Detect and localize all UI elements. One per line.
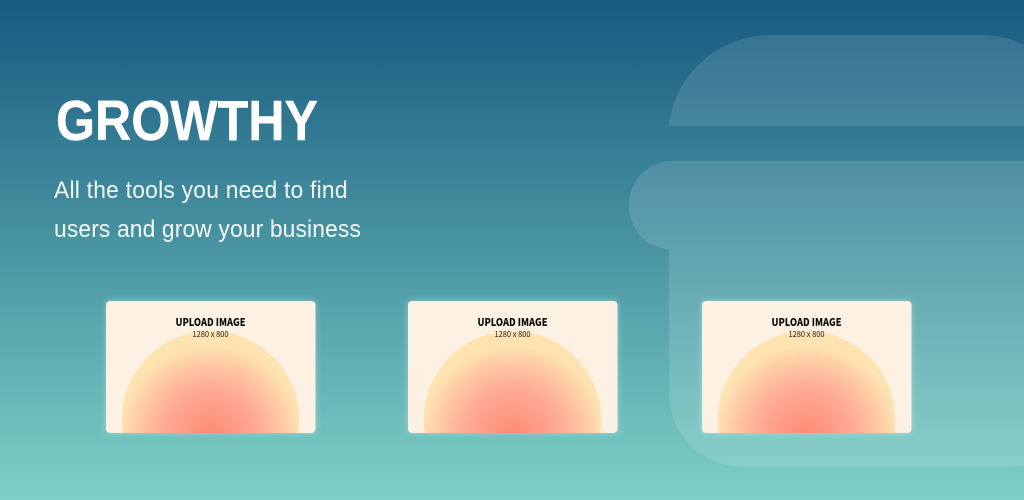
sun gradient 2 <box>424 331 602 433</box>
size label 1: 1280 x 800 <box>192 329 229 340</box>
subtitle line 2: users and grow your business <box>54 215 361 242</box>
upload label 1: UPLOAD IMAGE <box>176 315 246 330</box>
image placeholder card 1 <box>102 298 319 436</box>
sun gradient 3 <box>718 331 896 433</box>
image placeholder card 3 <box>698 298 915 436</box>
upload label 2: UPLOAD IMAGE <box>478 315 548 330</box>
image placeholder card 2 <box>404 298 621 436</box>
decorative background shapes <box>629 35 1024 467</box>
upload label 3: UPLOAD IMAGE <box>772 315 842 330</box>
size label 3: 1280 x 800 <box>788 329 825 340</box>
size label 2: 1280 x 800 <box>494 329 531 340</box>
shape: lower rounded block with side pill <box>629 161 1024 467</box>
shape: upper rounded block <box>669 35 1024 126</box>
subtitle line 1: All the tools you need to find <box>54 176 348 203</box>
title: GROWTHY <box>56 89 318 153</box>
subtitle <box>54 176 361 242</box>
sun gradient 1 <box>122 331 300 433</box>
